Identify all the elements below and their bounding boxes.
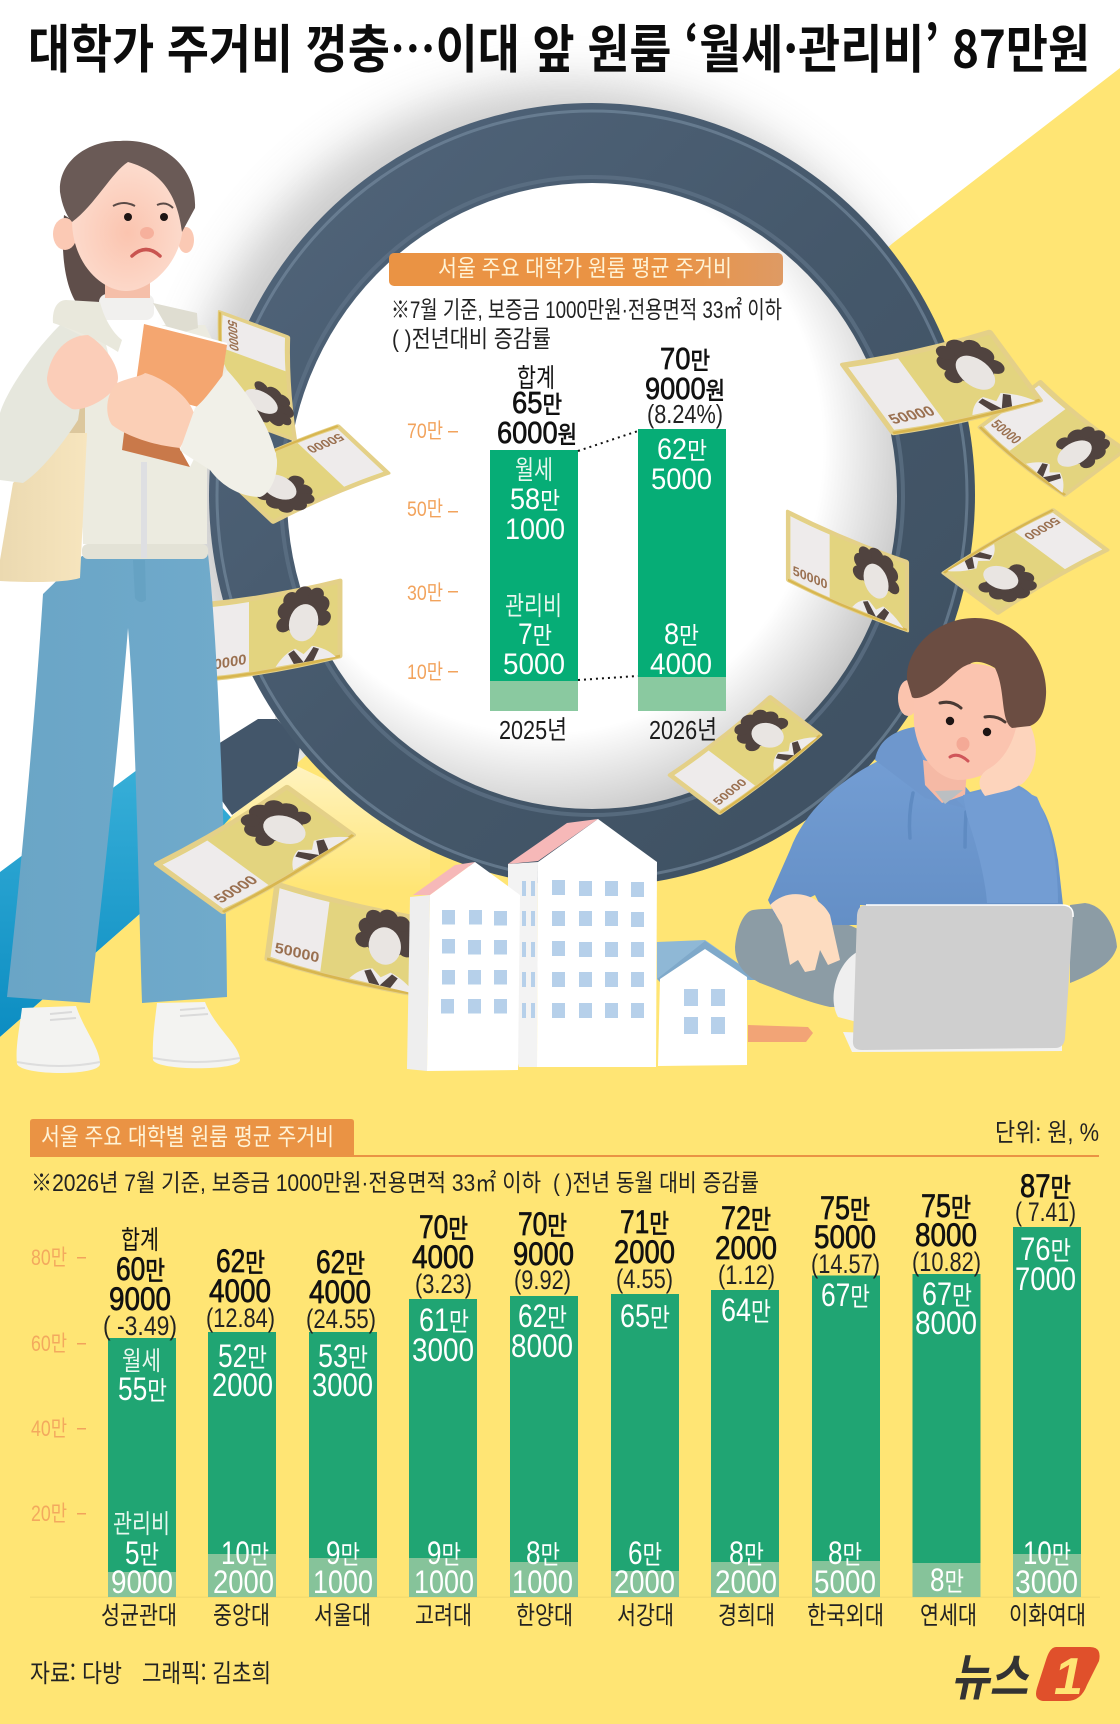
column: 고려대: 고려대 bbox=[415, 1596, 472, 1632]
money bill: right front: 50000 bbox=[886, 404, 939, 427]
source credit bbox=[30, 1654, 271, 1690]
column: 한국외대 bbox=[807, 1190, 884, 1632]
column: 한국외대: 5000 bbox=[814, 1219, 876, 1255]
y axis: 80만 bbox=[31, 1245, 67, 1270]
column: 이화여대: 7000 bbox=[1015, 1261, 1076, 1297]
raised arm sleeve bbox=[963, 785, 1058, 903]
lens chart header: 서울 주요 대학가 원룸 평균 주거비 bbox=[438, 249, 732, 283]
hoodie body bbox=[768, 727, 1063, 925]
column: 고려대: (3.23) bbox=[415, 1269, 472, 1299]
tote bag bbox=[0, 400, 87, 582]
y axis: 60만 bbox=[31, 1331, 67, 1356]
face bbox=[72, 162, 183, 291]
source credit: 자료: 다방 bbox=[30, 1654, 122, 1690]
column: 경희대: 2000 bbox=[715, 1564, 777, 1600]
total label 2025: 65만 bbox=[512, 385, 562, 420]
column: 한양대: 8만 bbox=[526, 1535, 560, 1572]
column: 성균관대: 9000 bbox=[109, 1281, 171, 1317]
column: 이화여대 bbox=[1009, 1168, 1086, 1632]
panel: university chart bbox=[30, 1117, 1100, 1632]
column: 중앙대: 2000 bbox=[212, 1367, 273, 1403]
column: 서강대: 71만 bbox=[620, 1204, 669, 1241]
money bill: lower inside lens: 50000 bbox=[710, 777, 750, 807]
column: 고려대: 70만 bbox=[419, 1209, 468, 1246]
column: 서강대: 65만 bbox=[620, 1298, 670, 1335]
column: 이화여대: 3000 bbox=[1015, 1564, 1078, 1600]
face bbox=[913, 663, 1020, 780]
bar 2025: 1000 bbox=[505, 513, 565, 546]
column: 서울대 bbox=[306, 1244, 377, 1632]
column: 서울대: 9만 bbox=[326, 1535, 360, 1572]
money bill: behind woman's legs: 50000 bbox=[206, 652, 246, 675]
column: 이화여대: ( 7.41) bbox=[1015, 1197, 1076, 1227]
left sleeve bbox=[0, 325, 90, 483]
lens chart note: ※7월 기준, 보증금 1000만원·전용면적 33㎡ 이하 bbox=[391, 297, 782, 324]
column: 연세대: 67만 bbox=[922, 1276, 972, 1313]
total label 2025 bbox=[497, 358, 577, 450]
hands bbox=[47, 335, 195, 448]
column: 서강대 bbox=[611, 1204, 679, 1632]
lens chart x labels bbox=[499, 715, 717, 745]
bar 2026: 4000 bbox=[650, 648, 712, 681]
column: 서울대: 62만 bbox=[316, 1244, 365, 1281]
column: 중앙대 bbox=[206, 1243, 276, 1632]
panel: lens chart 2025 vs 2026 bbox=[389, 249, 783, 745]
hair fringe bbox=[60, 141, 195, 232]
hood bbox=[875, 727, 965, 808]
total label 2025: 6000원 bbox=[497, 415, 577, 450]
lens chart axis: 70만 bbox=[407, 420, 443, 443]
column: 서울대: 4000 bbox=[309, 1274, 371, 1310]
money bill: behind woman upper bbox=[218, 311, 296, 440]
money bill: large lower left bbox=[267, 883, 429, 998]
bar 2025: 7만 bbox=[518, 616, 552, 651]
money bill: lower left tilted: 50000 bbox=[211, 873, 262, 906]
column: 서강대: 2000 bbox=[614, 1564, 675, 1600]
ear bbox=[898, 680, 918, 716]
column: 한양대: (9.92) bbox=[514, 1265, 571, 1295]
money bill: right lower inside lens bbox=[788, 511, 907, 632]
column: 고려대: 1000 bbox=[414, 1564, 474, 1600]
background: pale fade on yellow under ring bbox=[200, 765, 430, 890]
column: 한양대 bbox=[510, 1206, 578, 1632]
column: 연세대 bbox=[912, 1188, 981, 1632]
column: 한양대: 9000 bbox=[513, 1236, 574, 1272]
ring drop shadow bbox=[180, 85, 950, 865]
column: 고려대: 61만 bbox=[419, 1302, 469, 1339]
illustration: student with books bbox=[0, 141, 277, 1073]
column: 이화여대: 76만 bbox=[1020, 1231, 1071, 1268]
column: 경희대: 8만 bbox=[729, 1535, 764, 1572]
total label 2026: 9000원 bbox=[645, 371, 725, 406]
lens chart axis bbox=[407, 420, 458, 684]
hoodie bbox=[53, 294, 227, 559]
logo: News1 bbox=[951, 1638, 1100, 1710]
note: ※2026년 7월 기준, 보증금 1000만원·전용면적 33㎡ 이하 bbox=[31, 1170, 541, 1197]
neck bbox=[105, 280, 150, 298]
column: 서울대: 1000 bbox=[313, 1564, 373, 1600]
column: 경희대: 64만 bbox=[721, 1292, 771, 1329]
jeans bbox=[7, 554, 227, 1003]
money bill: behind woman upper: 50000 bbox=[225, 318, 241, 353]
column: 중앙대: 2000 bbox=[213, 1564, 274, 1600]
lens chart x labels: 2025년 bbox=[499, 715, 567, 745]
bar 2025: 5000 bbox=[503, 648, 565, 681]
total label 2026: (8.24%) bbox=[647, 399, 723, 429]
column: 연세대: 8000 bbox=[915, 1305, 977, 1341]
column: 한국외대: 8만 bbox=[828, 1535, 862, 1572]
right sleeve bbox=[180, 370, 277, 497]
money bill: by woman's elbow bbox=[221, 424, 388, 522]
column: 경희대: (1.12) bbox=[718, 1260, 775, 1290]
column: 성균관대: 성균관대 bbox=[101, 1596, 177, 1632]
column: 경희대: 72만 bbox=[721, 1200, 771, 1237]
column: 연세대: 8만 bbox=[930, 1562, 964, 1599]
column: 연세대: 75만 bbox=[921, 1188, 971, 1225]
bar 2025: 58만 bbox=[510, 481, 560, 516]
column: 연세대: 연세대 bbox=[920, 1596, 977, 1632]
logo: News1: 뉴스 bbox=[951, 1638, 1030, 1710]
shoe bbox=[834, 952, 857, 1022]
column: 한양대: 62만 bbox=[518, 1298, 567, 1335]
column: 한국외대: 5000 bbox=[814, 1564, 876, 1600]
column: 성균관대: 월세 bbox=[122, 1341, 161, 1378]
column: 성균관대: 합계 bbox=[121, 1220, 159, 1257]
column: 한양대: 한양대 bbox=[516, 1596, 573, 1632]
face features bbox=[113, 203, 173, 256]
total label 2025: 합계 bbox=[517, 358, 555, 395]
lens chart axis: 10만 bbox=[407, 661, 443, 684]
book bbox=[122, 320, 227, 467]
face features bbox=[940, 702, 1005, 761]
column: 경희대 bbox=[711, 1200, 779, 1632]
lens chart axis: 30만 bbox=[407, 582, 443, 605]
column: 성균관대: 9000 bbox=[111, 1564, 173, 1600]
money bill: right lower inside lens: 50000 bbox=[793, 563, 827, 592]
source credit: 그래픽: 김초희 bbox=[142, 1654, 271, 1690]
section header bbox=[30, 1117, 1099, 1157]
column: 서울대: 53만 bbox=[318, 1338, 368, 1375]
sneakers bbox=[17, 1002, 240, 1073]
column: 고려대: 9만 bbox=[427, 1535, 461, 1572]
crossed legs bbox=[735, 903, 1117, 1007]
y axis: 40만 bbox=[31, 1416, 67, 1441]
neck and shirt bbox=[923, 760, 967, 804]
illustration: student with laptop bbox=[735, 618, 1117, 1052]
bar 2026: 8만 bbox=[664, 616, 699, 651]
money bill: by woman's elbow: 50000 bbox=[303, 431, 348, 456]
section header: 서울 주요 대학별 원룸 평균 주거비 bbox=[41, 1117, 334, 1152]
column: 중앙대: 62만 bbox=[216, 1243, 265, 1280]
lens chart x labels: 2026년 bbox=[649, 715, 717, 745]
background: blue diagonal band bbox=[0, 764, 238, 1037]
column: 연세대: 8000 bbox=[915, 1217, 977, 1253]
money bill: behind woman's legs bbox=[200, 580, 340, 683]
column: 성균관대: 60만 bbox=[116, 1251, 165, 1288]
unit: 단위: 원, % bbox=[995, 1119, 1099, 1147]
column: 서강대: 2000 bbox=[614, 1234, 675, 1270]
column: 서울대: 3000 bbox=[312, 1367, 373, 1403]
y axis bbox=[31, 1245, 86, 1526]
note: ( )전년 동월 대비 증감률 bbox=[553, 1170, 759, 1197]
y axis: 20만 bbox=[31, 1501, 67, 1526]
column: 성균관대 bbox=[101, 1220, 177, 1632]
money bill: right upside down bbox=[942, 509, 1107, 613]
column: 서울대: 서울대 bbox=[314, 1596, 371, 1632]
hood strings bbox=[909, 793, 966, 847]
column: 한양대: 1000 bbox=[512, 1564, 573, 1600]
bar 2026 bbox=[638, 429, 726, 711]
column: 성균관대: ( -3.49) bbox=[103, 1311, 177, 1341]
lens chart note bbox=[391, 297, 782, 353]
column: 중앙대: 52만 bbox=[218, 1338, 267, 1375]
house bbox=[657, 940, 762, 1066]
column: 서강대: (4.55) bbox=[616, 1264, 673, 1294]
column: 한양대: 70만 bbox=[518, 1206, 567, 1243]
laptop bbox=[843, 905, 1073, 1052]
column: 이화여대: 이화여대 bbox=[1009, 1596, 1086, 1632]
hair bbox=[907, 618, 1046, 728]
column: 성균관대: 55만 bbox=[118, 1371, 167, 1408]
back hair bbox=[63, 215, 120, 305]
column: 중앙대: 10만 bbox=[221, 1535, 269, 1572]
money bill: right back: 50000 bbox=[987, 417, 1025, 447]
illustration: buildings bbox=[407, 819, 762, 1071]
column: 서울대: (24.55) bbox=[306, 1304, 376, 1334]
column: 고려대: 4000 bbox=[412, 1239, 474, 1275]
money bill: large lower left: 50000 bbox=[274, 940, 320, 966]
column: 이화여대: 87만 bbox=[1020, 1168, 1071, 1205]
magnifying glass bbox=[200, 103, 975, 887]
column: 중앙대: (12.84) bbox=[206, 1303, 275, 1333]
logo: News1: 1 bbox=[1054, 1648, 1083, 1706]
total label 2026 bbox=[645, 341, 725, 429]
column: 중앙대: 4000 bbox=[209, 1273, 271, 1309]
column: 서강대: 서강대 bbox=[617, 1596, 674, 1632]
tall apartment bbox=[508, 819, 657, 1067]
column: 고려대 bbox=[409, 1209, 477, 1632]
money bill: right back bbox=[978, 382, 1120, 497]
bar 2026: 5000 bbox=[651, 463, 712, 496]
bar 2025: 월세 bbox=[515, 450, 553, 487]
column: 경희대: 2000 bbox=[715, 1230, 777, 1266]
money bill: right upside down: 50000 bbox=[1020, 515, 1064, 542]
money bill: lower inside lens bbox=[670, 697, 822, 814]
column: 성균관대: 관리비 bbox=[113, 1504, 170, 1541]
bar 2025 bbox=[490, 450, 578, 711]
bar 2026: 62만 bbox=[657, 431, 707, 466]
resting hand bbox=[770, 894, 840, 972]
money bill: lower left tilted bbox=[156, 787, 355, 914]
lens chart axis: 50만 bbox=[407, 498, 443, 521]
column: 한국외대: 67만 bbox=[821, 1277, 870, 1314]
ears bbox=[53, 218, 194, 253]
column: 성균관대: 5만 bbox=[125, 1535, 159, 1572]
front apartment bbox=[407, 862, 520, 1071]
hand on cheek bbox=[980, 725, 1036, 796]
small book bbox=[748, 1025, 813, 1042]
column: 한국외대: (14.57) bbox=[811, 1249, 880, 1279]
column: 한국외대: 75만 bbox=[820, 1190, 870, 1227]
column: 한국외대: 한국외대 bbox=[807, 1596, 884, 1632]
column: 서강대: 6만 bbox=[628, 1535, 662, 1572]
column: 경희대: 경희대 bbox=[718, 1596, 775, 1632]
bar 2025: 관리비 bbox=[505, 586, 562, 623]
column: 고려대: 3000 bbox=[412, 1332, 474, 1368]
column: 연세대: (10.82) bbox=[912, 1247, 981, 1277]
column: 중앙대: 중앙대 bbox=[213, 1596, 270, 1632]
column: 한양대: 8000 bbox=[511, 1328, 573, 1364]
lens chart note: ( )전년대비 증감률 bbox=[392, 326, 551, 353]
column: 이화여대: 10만 bbox=[1023, 1535, 1071, 1572]
money bill: right front bbox=[843, 331, 1042, 435]
total label 2026: 70만 bbox=[660, 341, 710, 376]
